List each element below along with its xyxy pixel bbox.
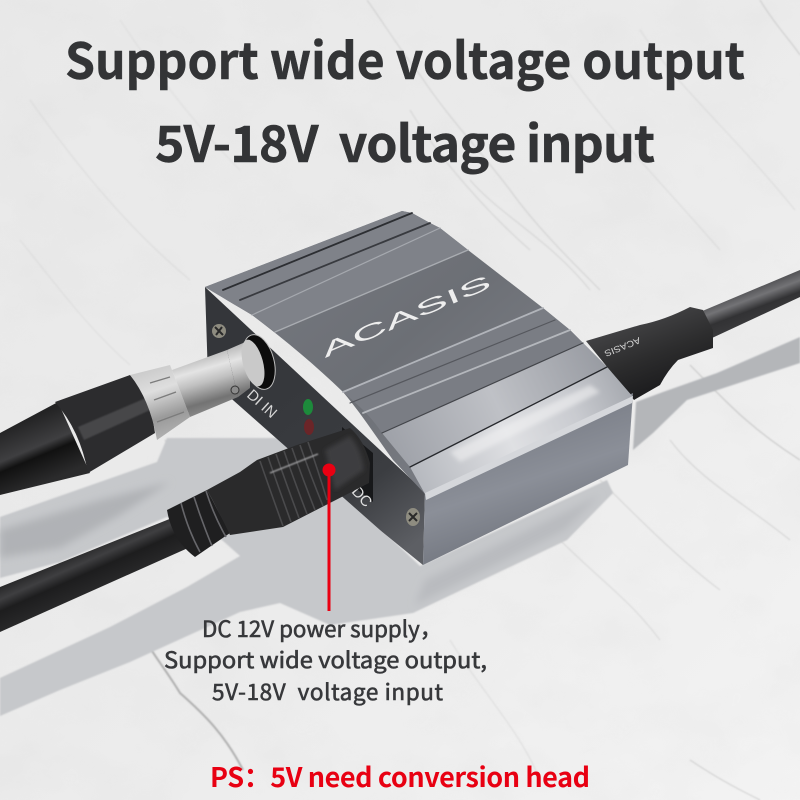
top face	[205, 211, 633, 494]
HDMI cable	[700, 270, 800, 338]
BNC black cable	[0, 402, 90, 495]
device box	[205, 211, 633, 565]
BNC port ring	[237, 331, 281, 393]
caption line 2: Support wide voltage output,	[164, 643, 487, 675]
caption line 3: 5V-18V voltage input	[212, 675, 444, 707]
BNC metal neck	[172, 350, 238, 417]
plug ribs	[260, 442, 327, 526]
strain ring grooves	[181, 491, 226, 552]
DC label: DC	[348, 483, 375, 511]
BNC pin	[231, 386, 239, 394]
bright stripe highlight	[450, 385, 600, 462]
HDMI logo: ACASIS	[603, 335, 642, 359]
caption	[164, 612, 487, 707]
plug body	[207, 428, 370, 535]
BNC head face	[237, 337, 269, 389]
plug head highlight	[325, 436, 364, 490]
plug shine	[270, 454, 318, 473]
caption line 1: DC 12V power supply，	[202, 612, 442, 644]
leader dot	[322, 464, 336, 476]
sleeve highlight	[78, 398, 150, 440]
SDI IN label: DI IN	[243, 386, 280, 422]
HDMI cable and plug	[586, 270, 800, 400]
screw bottom-right	[406, 508, 420, 526]
leader line	[328, 470, 330, 611]
bright edge strip	[410, 367, 633, 494]
side panel	[423, 393, 633, 565]
knurled collar	[130, 365, 190, 440]
table shadows	[0, 337, 800, 716]
light shadow area around the plug	[0, 438, 613, 716]
ACASIS logo: ACASIS	[318, 271, 494, 363]
light middle strip	[382, 343, 607, 467]
title	[65, 22, 745, 177]
BNC cable	[0, 337, 269, 495]
back ridge band	[205, 211, 468, 332]
red LED	[304, 419, 314, 435]
front ridge band	[343, 308, 583, 433]
DC port plate	[342, 427, 373, 502]
HDMI plug	[586, 307, 713, 400]
collar notches	[150, 377, 184, 422]
DC power cable	[0, 428, 370, 632]
title line 2: 5V-18V voltage input	[155, 105, 655, 177]
screw top-left	[212, 324, 226, 338]
callout leader	[322, 464, 336, 611]
DC cable	[0, 518, 188, 632]
darker core shadow under box	[415, 495, 600, 605]
strain relief rings	[167, 490, 230, 557]
side highlight edge	[425, 396, 633, 500]
title line 1: Support wide voltage output	[65, 22, 745, 94]
PS note: PS：5V need conversion head	[210, 756, 590, 795]
BNC head	[227, 340, 250, 397]
darker core shadow left	[0, 482, 170, 558]
dark connector face	[205, 287, 425, 565]
BNC sleeve	[55, 375, 155, 473]
green LED	[303, 399, 313, 415]
top grooves	[223, 213, 607, 467]
shadow of HDMI cable	[633, 337, 800, 450]
